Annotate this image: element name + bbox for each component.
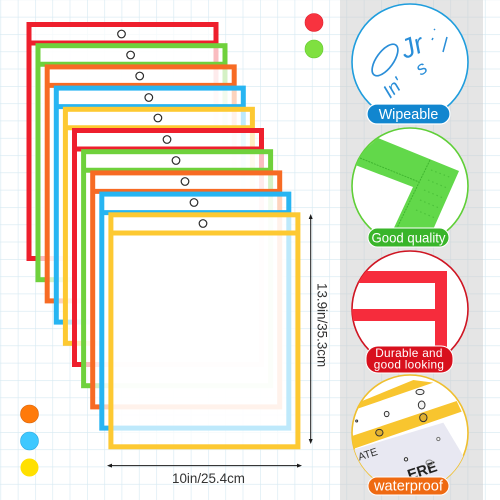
red pocket 2 [74,130,262,364]
feature: good quality [350,128,468,247]
durable badge [366,346,453,373]
feature: waterproof [350,375,472,500]
colour dot: yellow [20,458,38,476]
durable badge: Durable and [375,346,443,360]
durable badge: good looking [374,358,444,372]
yellow pocket 1 [65,109,252,343]
eyelet holes [118,30,207,227]
blue pocket 2 [102,194,289,428]
height label: 13.9in/35.3cm [314,283,330,367]
feature: waterproof: ATE [357,446,379,464]
waterproof badge: waterproof [373,478,444,494]
yellow strips [350,380,462,450]
paper [354,422,464,478]
scribble [367,28,447,103]
width dimension arrow [107,464,302,468]
pocket stack [29,24,298,447]
colour dot: green [305,40,323,58]
wipeable badge: Wipeable [379,107,438,123]
green corner [356,138,459,228]
blue pocket 1 [56,88,243,322]
scribble: In' [379,73,409,103]
orange pocket 1 [47,67,234,301]
feature: wipeable [352,4,468,124]
good quality badge: Good quality [372,230,446,246]
width label: 10in/25.4cm [172,471,245,486]
water droplets [356,389,440,465]
yellow pocket 2 [111,215,298,447]
gray side panel [340,0,483,500]
feature: durable [350,251,468,373]
red corner [350,271,447,350]
red pocket 1 [29,24,216,258]
colour dot: red [305,14,323,32]
colour dot: blue [20,432,38,450]
colour dot: orange [20,405,38,423]
scribble: Jr [395,28,429,65]
feature: waterproof: ERE [406,459,439,484]
height dimension arrow [309,214,313,444]
green pocket 1 [38,46,225,280]
scribble: s [412,57,432,80]
green pocket 2 [84,152,271,386]
orange pocket 2 [93,173,280,407]
